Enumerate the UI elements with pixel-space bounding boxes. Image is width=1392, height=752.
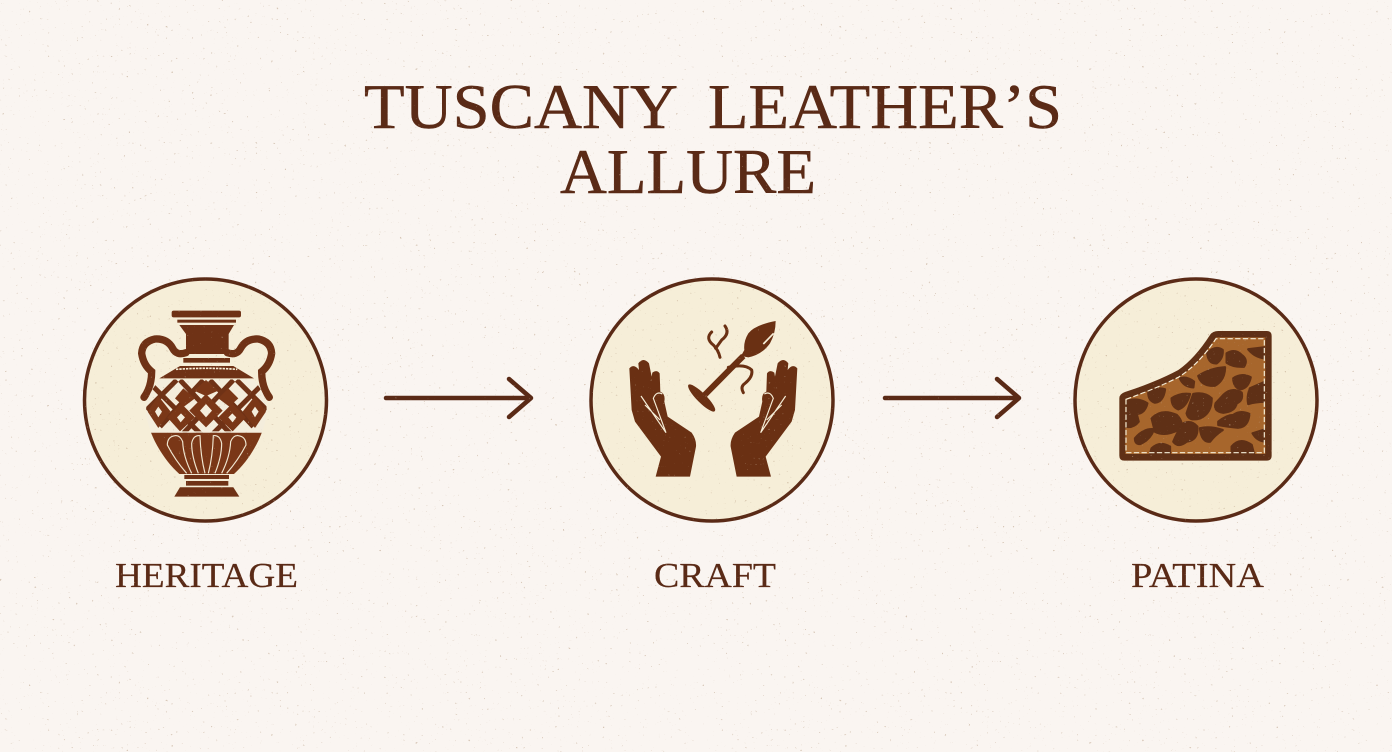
label: craft: CRAFT <box>654 556 776 595</box>
panel: patina <box>1075 279 1317 595</box>
patch stitching <box>1126 339 1264 453</box>
icon: leather patch <box>1119 331 1272 461</box>
vase body <box>143 378 270 476</box>
right hand <box>731 360 797 477</box>
label: heritage: HERITAGE <box>115 556 298 595</box>
title: LEATHER’S <box>708 71 1062 142</box>
title: ALLURE <box>560 136 816 207</box>
arrow 1 <box>386 379 531 417</box>
heritage badge circle <box>84 279 326 521</box>
left hand <box>629 360 696 477</box>
title: TUSCANY <box>364 71 678 142</box>
vase handles <box>142 339 272 397</box>
icon: amphora vase <box>142 311 272 497</box>
label: patina: PATINA <box>1131 556 1265 595</box>
patina badge circle <box>1075 279 1317 521</box>
patch spots <box>1125 347 1265 454</box>
panel: heritage <box>84 279 326 595</box>
craft badge circle <box>591 279 833 521</box>
icon: hands and tool <box>629 321 797 477</box>
vase foot <box>174 475 239 497</box>
panel: craft <box>591 279 833 595</box>
title <box>364 71 1062 207</box>
tool <box>685 321 776 414</box>
arrow 2 <box>885 379 1019 417</box>
